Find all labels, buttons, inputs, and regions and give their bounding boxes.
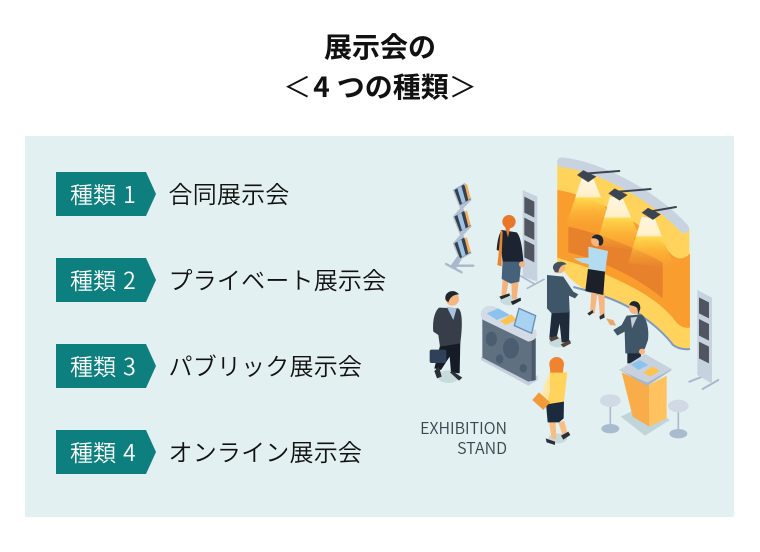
lower right group (600, 290, 718, 438)
panel: background (25, 136, 734, 517)
lower left group (430, 262, 578, 445)
badge: type 1 (56, 172, 156, 216)
label: type 1: 合同展示会 (168, 175, 290, 210)
badge: type 2 (56, 258, 156, 302)
badge: type 3 (56, 344, 156, 388)
title: ＜4つの種類＞ (283, 66, 477, 106)
label: type 2: プライベート展示会 (168, 261, 386, 296)
spot lamps (577, 170, 676, 220)
woman in yellow (532, 357, 570, 445)
man with briefcase (430, 291, 462, 383)
booth wall (557, 162, 690, 349)
badge: type 3: 種類 3 (70, 348, 136, 382)
badge: type 1: 種類 1 (70, 176, 136, 210)
left group (446, 183, 544, 305)
stools (600, 394, 689, 438)
caption: EXHIBITION STAND (420, 415, 507, 459)
caption: EXHIBITION STAND: STAND (457, 435, 507, 459)
label: type 4: オンライン展示会 (168, 433, 362, 468)
badge: type 4 (56, 430, 156, 474)
label: type 3: パブリック展示会 (168, 347, 362, 382)
center man (547, 262, 578, 347)
badge: type 2: 種類 2 (70, 262, 136, 296)
brochure rack (446, 183, 473, 272)
receptionist (573, 234, 608, 320)
light beams (565, 178, 675, 268)
title: 展示会の (324, 26, 436, 66)
display stand right (689, 290, 718, 389)
badge: type 4: 種類 4 (70, 434, 136, 468)
display stand (520, 190, 544, 288)
woman in black (497, 215, 525, 305)
title (283, 26, 477, 106)
podium (619, 354, 672, 436)
wall top cap (562, 162, 684, 228)
caption: EXHIBITION STAND: EXHIBITION (420, 415, 507, 439)
counter (481, 306, 538, 386)
man with suit (606, 301, 648, 363)
